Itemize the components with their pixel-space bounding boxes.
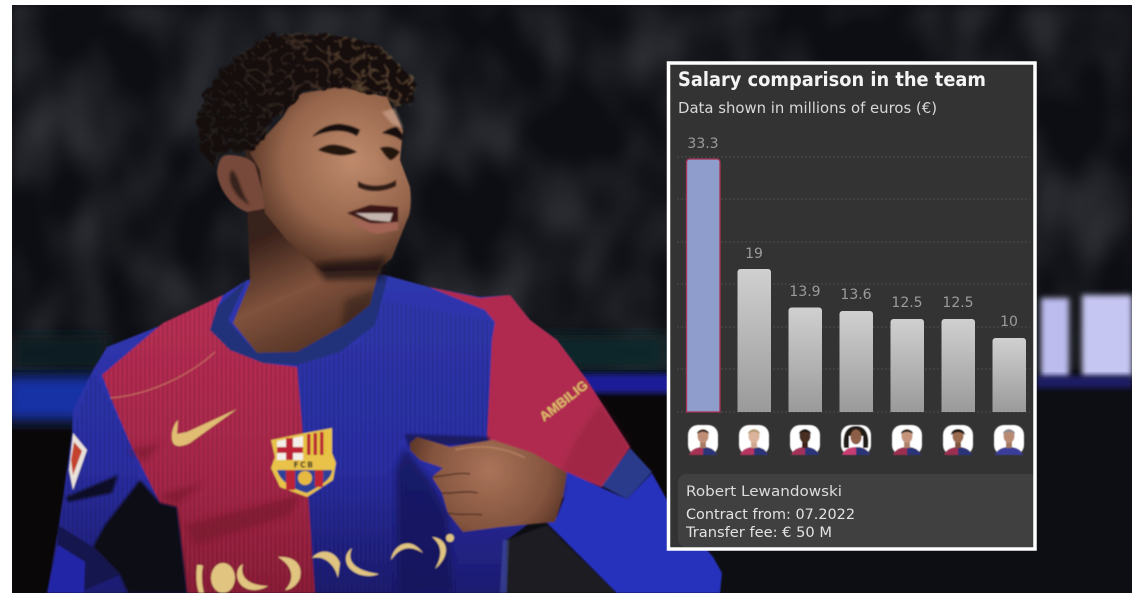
icons: player avatars bbox=[688, 425, 1024, 455]
right forearm sleeve bbox=[547, 472, 722, 593]
chest fold shadows bbox=[128, 443, 300, 545]
yoke stitch line bbox=[110, 352, 215, 398]
bar: 13.6 bbox=[840, 287, 873, 412]
nose bbox=[358, 180, 396, 191]
player: photo cut-out bbox=[47, 32, 722, 593]
subtitle: Data shown in millions of euros (€) bbox=[678, 99, 937, 117]
bar: 12.5 bbox=[890, 295, 924, 412]
callout: selected player details: Transfer fee: € 50 M bbox=[685, 525, 832, 541]
bar: 19 bbox=[738, 246, 771, 412]
red right shoulder panel bbox=[429, 287, 630, 487]
FC Barcelona crest: FCB bbox=[294, 460, 314, 470]
bar: 10: 10 bbox=[1000, 314, 1018, 330]
moon phases on shirt bbox=[196, 534, 454, 593]
bar: 13.9 bbox=[788, 284, 822, 412]
jersey torso blue bbox=[47, 274, 568, 593]
dark underarm area bbox=[507, 525, 617, 593]
bar: 13.6: 13.6 bbox=[840, 287, 872, 303]
ear bbox=[217, 155, 267, 212]
dark side shadow bbox=[93, 480, 187, 593]
avatar 5 bbox=[892, 425, 922, 455]
hair bbox=[197, 32, 417, 170]
hand highlight bbox=[455, 447, 525, 458]
shadow below hand on shirt bbox=[396, 448, 453, 593]
blue LED band left bbox=[6, 376, 101, 420]
bar: 12.5 second bbox=[942, 295, 975, 412]
sleeve cuff bbox=[602, 448, 652, 499]
left arm badge bbox=[69, 433, 87, 490]
bar: 33.3 highlighted: 33.3 bbox=[687, 136, 719, 152]
FC Barcelona crest bbox=[271, 428, 336, 497]
sleeve dark band bbox=[57, 525, 120, 590]
bar: 10 bbox=[992, 314, 1026, 412]
avatar 3 bbox=[790, 425, 820, 455]
bright blurred signage right bbox=[1041, 295, 1132, 378]
callout: selected player details: Robert Lewandowski bbox=[686, 484, 842, 500]
sleeve sponsor text: AMBILIG bbox=[537, 377, 591, 424]
blue LED band right bbox=[578, 374, 673, 393]
forehead highlight bbox=[382, 108, 403, 128]
heading: Salary comparison in the team bbox=[678, 68, 986, 91]
callout: selected player details bbox=[678, 474, 1033, 547]
eyebrows bbox=[312, 124, 403, 141]
pointing hand bbox=[410, 437, 567, 532]
bar: 19: 19 bbox=[745, 246, 763, 262]
chin stubble bbox=[315, 256, 385, 280]
bar: 12.5 second: 12.5 bbox=[942, 295, 974, 311]
panel: salary comparison card bbox=[668, 63, 1035, 549]
eyes bbox=[318, 145, 400, 160]
collar bbox=[210, 274, 388, 365]
bar chart: salaries bbox=[686, 136, 1026, 412]
callout: selected player details: Contract from: 07.2022 bbox=[686, 507, 855, 523]
avatar 6 bbox=[943, 425, 973, 455]
red left chest panel bbox=[102, 295, 315, 593]
shirt logo: swoosh bbox=[172, 409, 237, 446]
bar: 33.3 highlighted bbox=[686, 136, 720, 412]
mouth bbox=[347, 205, 398, 224]
avatar 7 bbox=[994, 425, 1024, 455]
avatar 1 bbox=[688, 425, 718, 455]
bar: 13.9: 13.9 bbox=[789, 284, 821, 300]
bar: 12.5: 12.5 bbox=[891, 295, 923, 311]
neck bbox=[233, 130, 382, 353]
face bbox=[250, 87, 411, 272]
avatar 2 bbox=[739, 425, 769, 455]
avatar 4 bbox=[841, 425, 871, 455]
